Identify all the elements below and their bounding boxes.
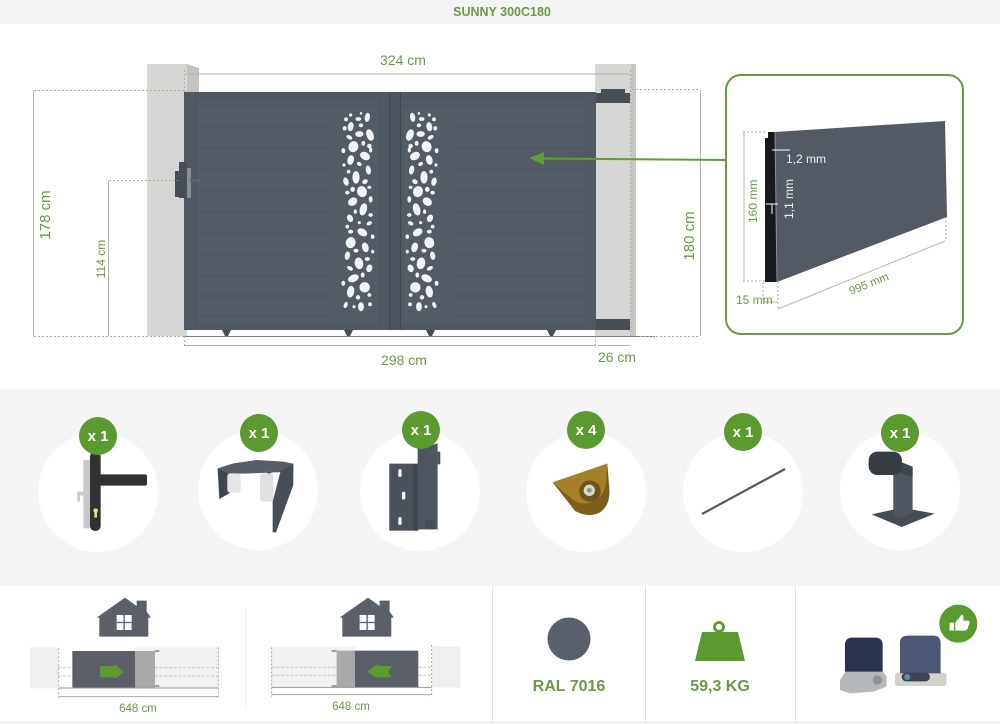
motor two [895,636,947,686]
gate drawing [184,92,655,336]
concrete post: right [595,64,636,336]
dimension: 114 cm: 114 cm [94,240,108,278]
hinge: top right [596,89,630,103]
opening diagram: sliding left [272,598,460,697]
panel: slat profile detail [726,75,963,334]
arrow: profile to gate [529,152,726,165]
label: 648 cm right: 648 cm [332,701,370,713]
house icon [340,598,394,637]
motor product image [840,605,977,693]
track diagram [272,645,460,697]
accessory: brass wheel [526,411,646,552]
weight: 59,3 KG [690,622,750,695]
header band with title [0,0,1000,24]
accessory: guide bracket [198,414,318,550]
dimension: 26 cm: 26 cm [598,349,636,365]
gate stop drawing [869,452,935,527]
width line [59,695,218,698]
label: 1,2 mm: 1,2 mm [786,152,826,166]
colour swatch: RAL 7016 [533,618,605,695]
label: 15 mm: 15 mm [736,293,773,307]
accessory: handle: x 1 [88,428,108,445]
label: 648 cm left: 648 cm [119,703,157,715]
pebble cut-outs: right leaf [405,113,438,311]
concrete post: left [147,64,199,336]
accessory: latch plate: x 1 [411,422,431,439]
accessory: handle [38,417,158,552]
latch on left post [175,162,201,198]
handle drawing [77,452,147,531]
motor one [840,638,887,693]
label: 995 mm: 995 mm [848,271,891,298]
label: 1,1 mm: 1,1 mm [782,179,796,219]
slat lines [196,106,586,317]
dimension: 178 cm: 178 cm [37,190,54,240]
track diagram [30,647,218,698]
accessories band [0,389,1000,586]
label: 160 mm: 160 mm [746,180,760,223]
accessory: rod: x 1 [733,424,753,441]
accessory: guide bracket: x 1 [249,425,269,442]
accessory: rod [683,413,803,552]
dimension: 298 cm: 298 cm [381,352,427,368]
latch plate drawing [389,443,440,531]
thumbs-up badge [939,605,977,643]
slat profile [765,121,947,282]
colour swatch: RAL 7016: RAL 7016 [533,678,605,695]
house icon [97,598,151,637]
bracket drawing [218,460,293,532]
dimension: 180 cm: 180 cm [681,211,698,261]
bottom row dividers [0,586,1000,722]
width line [272,693,431,696]
wheel drawing [553,464,609,515]
pebble cut-outs: left leaf [342,113,375,311]
opening diagram: sliding right [30,598,218,698]
accessory: gate stop [840,414,960,550]
accessory: gate stop: x 1 [890,425,910,442]
dimension: 26 cm [596,336,636,365]
accessory: latch plate [360,411,480,551]
profile dimensions [743,132,946,309]
header band with title: SUNNY 300C180 [453,5,551,19]
gate feet [222,330,556,336]
dimension: 324 cm: 324 cm [380,52,426,68]
weight: 59,3 KG: 59,3 KG [690,678,750,695]
accessory: brass wheel: x 4 [576,422,597,439]
hinge: bottom right [596,319,630,330]
